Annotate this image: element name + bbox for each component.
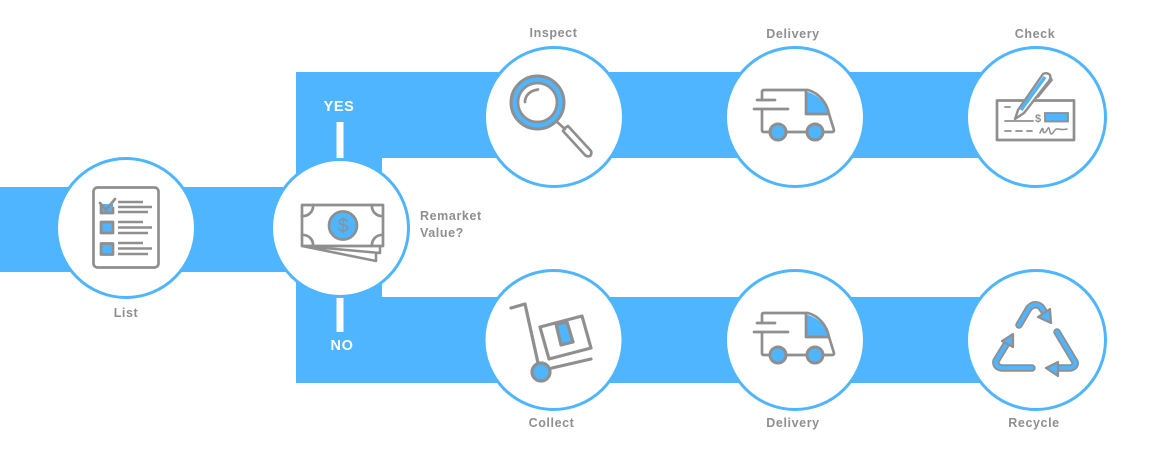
label: delivery top: Delivery [766, 27, 820, 41]
step: inspect [484, 26, 624, 186]
connector: no [336, 295, 344, 332]
band: list to decision [0, 187, 300, 272]
label: list: List [114, 306, 139, 320]
label: inspect: Inspect [530, 26, 578, 40]
label: remarket value: Remarket [420, 209, 482, 223]
step: list [56, 158, 196, 320]
label: collect: Collect [529, 416, 575, 430]
step: check [966, 27, 1106, 186]
label: yes: YES [324, 99, 354, 115]
band: yes path [296, 72, 1000, 228]
connector: yes [336, 122, 344, 162]
label: remarket value: Value? [420, 226, 464, 240]
step: delivery (bottom) [726, 270, 864, 430]
step: remarket value decision: $ [338, 216, 349, 237]
step: check: $ [1035, 113, 1041, 125]
step: remarket value decision [272, 160, 482, 296]
step: delivery (top) [726, 27, 864, 186]
label: check: Check [1015, 27, 1055, 41]
label: delivery bottom: Delivery [766, 416, 820, 430]
label: recycle: Recycle [1008, 416, 1060, 430]
step: recycle [966, 270, 1106, 430]
step: collect [484, 270, 623, 430]
band: no path [296, 228, 1000, 383]
label: no: NO [331, 338, 353, 354]
